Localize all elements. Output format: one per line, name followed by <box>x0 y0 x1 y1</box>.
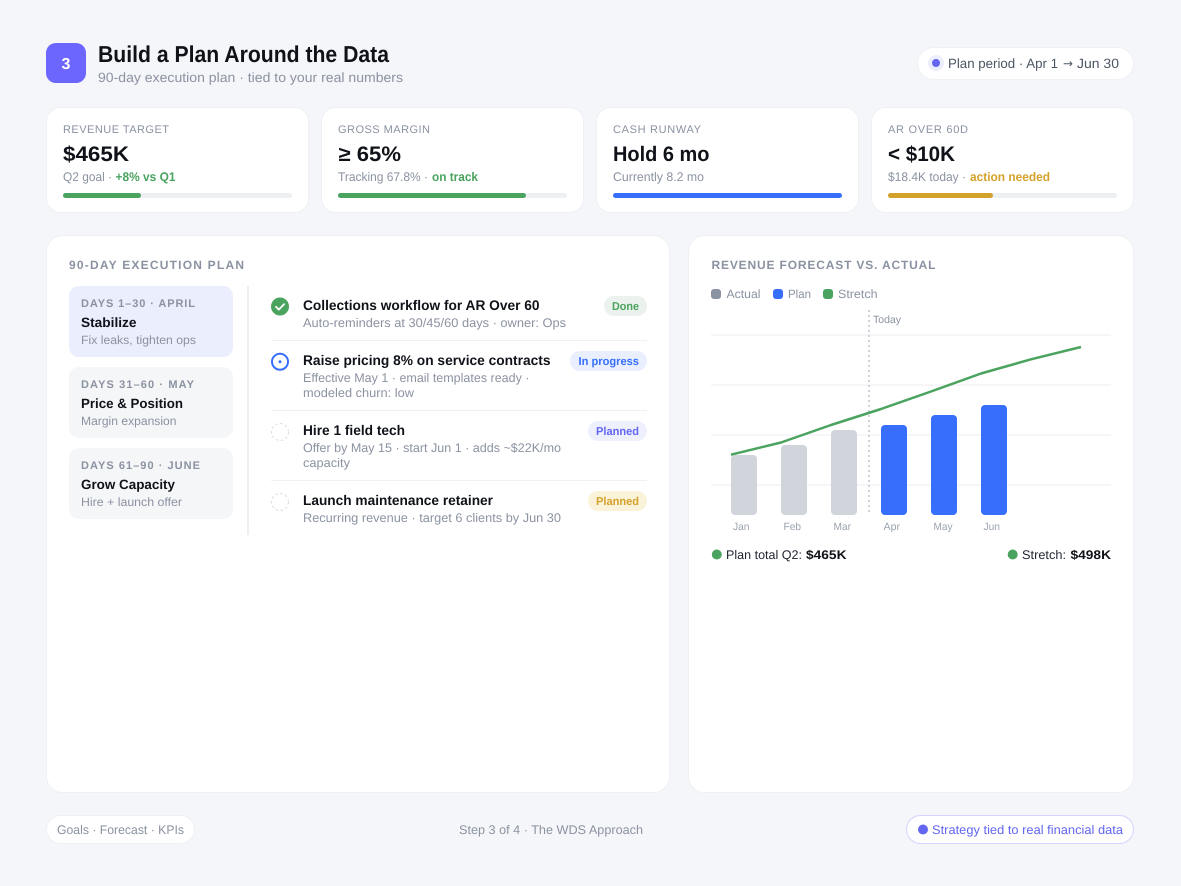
phase: grow capacity: Hire + launch offer <box>81 495 182 509</box>
panel: KPI AR over 60 days: < $10K <box>888 143 955 166</box>
task: launch maintenance retainer: Recurring revenue · target 6 clients by Jun 30 <box>303 511 561 525</box>
footer <box>46 816 1134 844</box>
summary: plan total: Plan total Q2: <box>726 548 802 562</box>
heading: execution plan: 90-DAY EXECUTION PLAN <box>69 258 244 272</box>
icon: step number badge: 3 <box>62 56 71 73</box>
status badge: planned <box>588 421 647 441</box>
status badge: done: Done <box>612 301 639 313</box>
task: collections workflow <box>271 296 647 330</box>
month labels: Jan <box>733 521 750 533</box>
panel: KPI AR over 60 days: action needed <box>970 170 1050 184</box>
panel: KPI cash runway: Currently 8.2 mo <box>613 170 704 184</box>
status badge: planned: Planned <box>596 496 639 508</box>
summary: stretch total <box>1008 548 1111 562</box>
title: Build a Plan Around the Data <box>98 41 389 67</box>
phase: price and position: Price & Position <box>81 396 183 411</box>
month labels: May <box>934 521 953 533</box>
plan period pill <box>918 48 1134 80</box>
task: collections workflow: Auto-reminders at 30/45/60 days · owner: Ops <box>303 316 566 330</box>
month labels <box>733 521 1000 533</box>
plan period pill: Jun 30 <box>1077 56 1119 71</box>
panel: KPI cash runway: Hold 6 mo <box>613 143 710 166</box>
month labels: Apr <box>884 521 901 533</box>
heading: revenue forecast: REVENUE FORECAST VS. ACTUAL <box>712 258 936 272</box>
phase: stabilize: Fix leaks, tighten ops <box>81 333 196 347</box>
month labels: Jun <box>984 521 1000 533</box>
footer step text: Step 3 of 4 · The WDS Approach <box>459 823 643 837</box>
panel: KPI revenue target <box>46 108 308 212</box>
task: hire field tech: capacity <box>303 456 351 470</box>
panel: KPI gross margin: ≥ 65% <box>338 143 401 166</box>
panel: KPI revenue target: +8% vs Q1 <box>116 170 176 184</box>
footer callout pill: Strategy tied to real financial data <box>932 823 1123 837</box>
panel: KPI gross margin: GROSS MARGIN <box>338 124 430 136</box>
icon: step number badge <box>46 43 86 83</box>
status badge: in progress <box>570 351 647 371</box>
panel: revenue forecast <box>688 236 1134 792</box>
icon: in progress <box>272 354 288 370</box>
phase: stabilize <box>69 286 233 357</box>
phase: grow capacity <box>69 448 233 519</box>
phase: price and position: DAYS 31–60 · MAY <box>81 379 195 391</box>
task: raise pricing: Effective May 1 · email templates ready · <box>303 371 530 385</box>
subtitle: 90-day execution plan · tied to your real numbers <box>98 70 403 85</box>
status badge: done <box>604 296 647 316</box>
panel: KPI gross margin: Tracking 67.8% · <box>338 170 428 184</box>
bar and line chart <box>711 310 1111 533</box>
phase: grow capacity: DAYS 61–90 · JUNE <box>81 460 200 472</box>
today marker: Today <box>873 314 902 326</box>
icon: planned <box>272 494 288 510</box>
status badge: planned: Planned <box>596 426 639 438</box>
task: launch maintenance retainer: Launch maintenance retainer <box>303 492 494 508</box>
icon: done check <box>271 298 289 316</box>
footer callout pill <box>906 816 1134 844</box>
panel: KPI gross margin: on track <box>432 170 478 184</box>
task: hire field tech: Hire 1 field tech <box>303 422 405 438</box>
task: hire field tech <box>272 421 647 470</box>
phase: price and position <box>69 367 233 438</box>
footer tag pill <box>46 816 194 844</box>
chart legend <box>711 287 878 301</box>
chart legend: Stretch <box>838 287 878 301</box>
task: launch maintenance retainer <box>272 491 647 525</box>
month labels: Mar <box>834 521 851 533</box>
bars: actual <box>731 430 857 515</box>
summary: stretch total: $498K <box>1070 548 1111 562</box>
chart legend: Actual <box>726 287 760 301</box>
summary: plan total: $465K <box>806 548 846 562</box>
panel: KPI revenue target: REVENUE TARGET <box>63 124 169 136</box>
phase: grow capacity: Grow Capacity <box>81 477 175 492</box>
icon: planned <box>272 424 288 440</box>
panel: KPI revenue target: Q2 goal · <box>63 170 112 184</box>
phase: stabilize: DAYS 1–30 · APRIL <box>81 298 195 310</box>
footer tag pill: Goals · Forecast · KPIs <box>57 823 184 837</box>
plan period pill: → <box>1063 56 1073 70</box>
panel: 90-day execution plan <box>46 236 670 792</box>
bars: plan <box>881 405 1007 515</box>
task: hire field tech: Offer by May 15 · start Jun 1 · adds ~$22K/mo <box>303 441 561 455</box>
task: raise pricing: modeled churn: low <box>303 386 415 400</box>
status badge: in progress: In progress <box>578 356 639 368</box>
stretch line <box>731 347 1081 455</box>
panel: KPI AR over 60 days <box>872 108 1134 212</box>
panel: KPI AR over 60 days: $18.4K today · <box>888 170 966 184</box>
panel: KPI AR over 60 days: AR OVER 60D <box>888 124 968 136</box>
plan period pill: Plan period · Apr 1 <box>948 56 1058 71</box>
summary: plan total <box>712 548 846 562</box>
header <box>46 41 403 85</box>
panel: KPI cash runway <box>596 108 858 212</box>
chart legend: Plan <box>788 287 811 301</box>
phase: stabilize: Stabilize <box>81 315 137 330</box>
task: raise pricing: Raise pricing 8% on service contracts <box>303 352 551 368</box>
panel: KPI gross margin <box>322 108 584 212</box>
panel: KPI revenue target: $465K <box>63 143 129 166</box>
month labels: Feb <box>784 521 801 533</box>
task: collections workflow: Collections workflow for AR Over 60 <box>303 297 540 313</box>
task: raise pricing <box>272 351 647 400</box>
panel: KPI cash runway: CASH RUNWAY <box>613 124 702 136</box>
summary: stretch total: Stretch: <box>1022 548 1066 562</box>
status badge: planned <box>588 491 647 511</box>
phase: price and position: Margin expansion <box>81 414 176 428</box>
